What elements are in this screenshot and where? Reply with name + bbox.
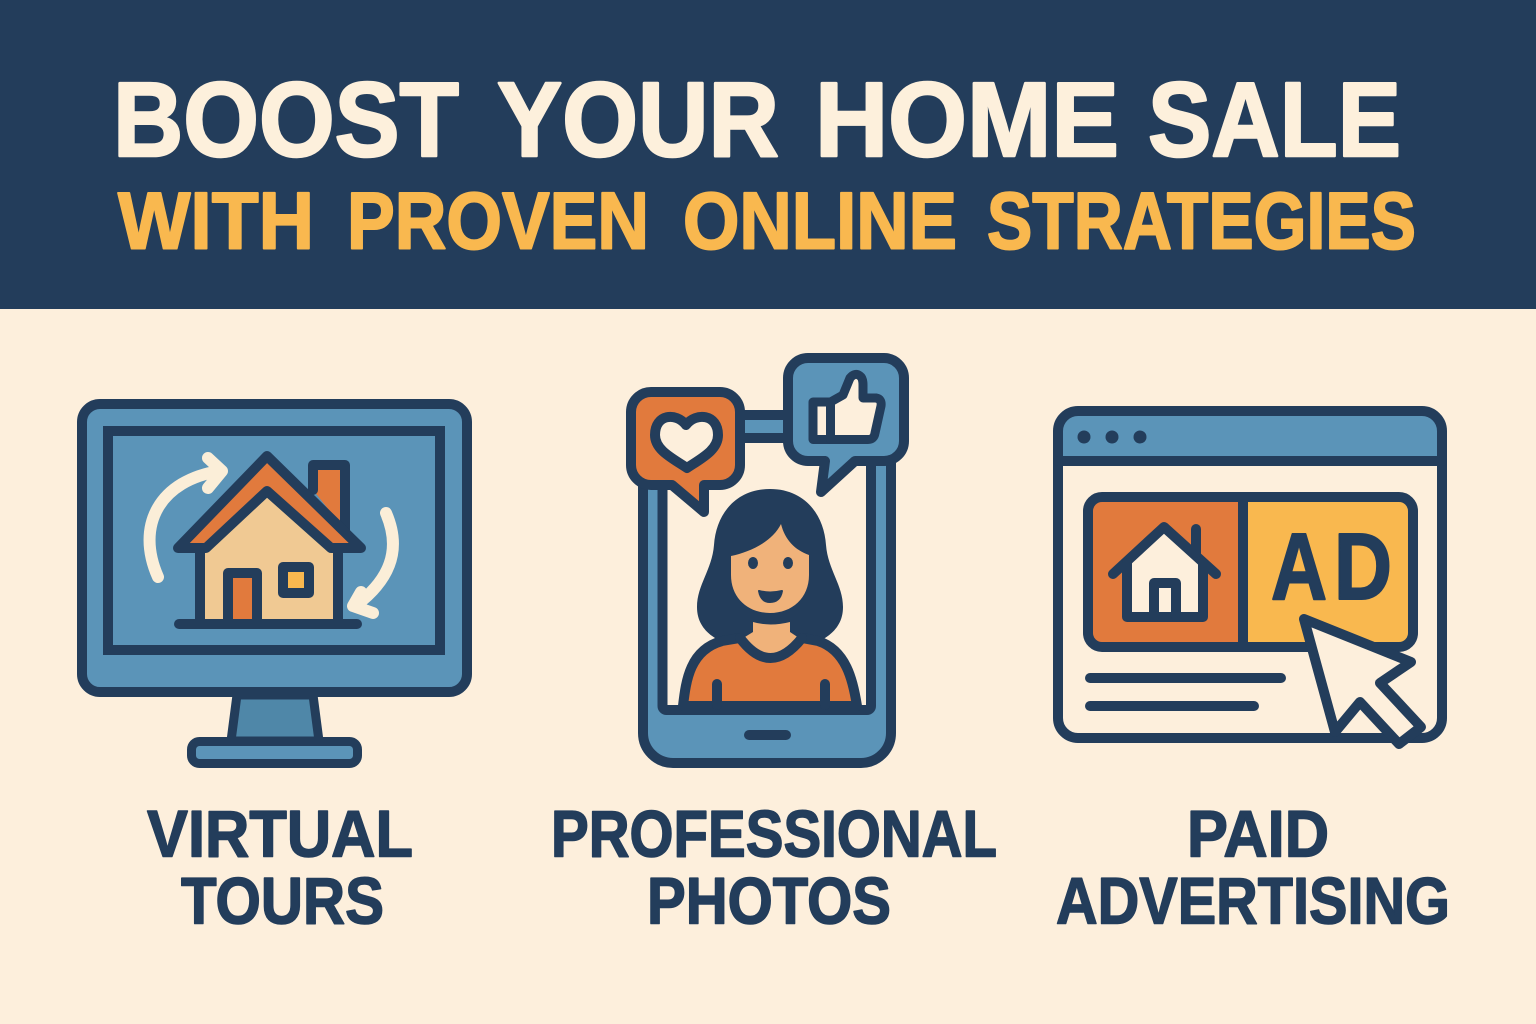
icon: cursor arrow <box>1304 619 1421 744</box>
icon: house <box>178 456 361 624</box>
ad text <box>1271 514 1392 620</box>
label: paid advertising: ADVERTISING <box>1056 864 1450 938</box>
title: HOME <box>815 61 1119 179</box>
title: SALE <box>1148 61 1401 179</box>
label: paid advertising <box>1056 796 1450 938</box>
title: BOOST <box>113 61 459 179</box>
label: professional photos: PROFESSIONAL <box>551 796 997 870</box>
ad text: D <box>1334 514 1392 620</box>
label: virtual tours <box>147 796 413 938</box>
ad banner <box>1088 497 1413 647</box>
icon: browser window <box>1058 411 1442 738</box>
panel: professional photos <box>551 358 997 938</box>
panel: paid advertising <box>1056 411 1450 938</box>
ad text: A <box>1271 514 1327 620</box>
icon: small house <box>1113 527 1216 617</box>
label: virtual tours: VIRTUAL <box>147 796 413 870</box>
title <box>113 61 1416 266</box>
title: ONLINE <box>683 176 957 266</box>
title: WITH <box>118 176 314 266</box>
label: virtual tours: TOURS <box>181 864 384 938</box>
label: paid advertising: PAID <box>1187 796 1329 870</box>
text lines <box>1090 678 1281 706</box>
header band <box>0 0 1536 309</box>
title: PROVEN <box>347 176 649 266</box>
arrow: rotate left <box>150 458 222 577</box>
label: professional photos: PHOTOS <box>647 864 891 938</box>
icon: thumbs up speech bubble <box>788 358 904 492</box>
icon: heart speech bubble <box>631 392 740 512</box>
title: STRATEGIES <box>987 176 1416 266</box>
arrow: rotate right <box>353 513 393 613</box>
label: professional photos <box>551 796 997 938</box>
panel: virtual tours <box>82 404 467 938</box>
illustration: woman portrait <box>683 489 857 706</box>
icon: desktop monitor <box>82 404 467 764</box>
title: YOUR <box>497 61 779 179</box>
icon: smartphone <box>643 415 891 763</box>
